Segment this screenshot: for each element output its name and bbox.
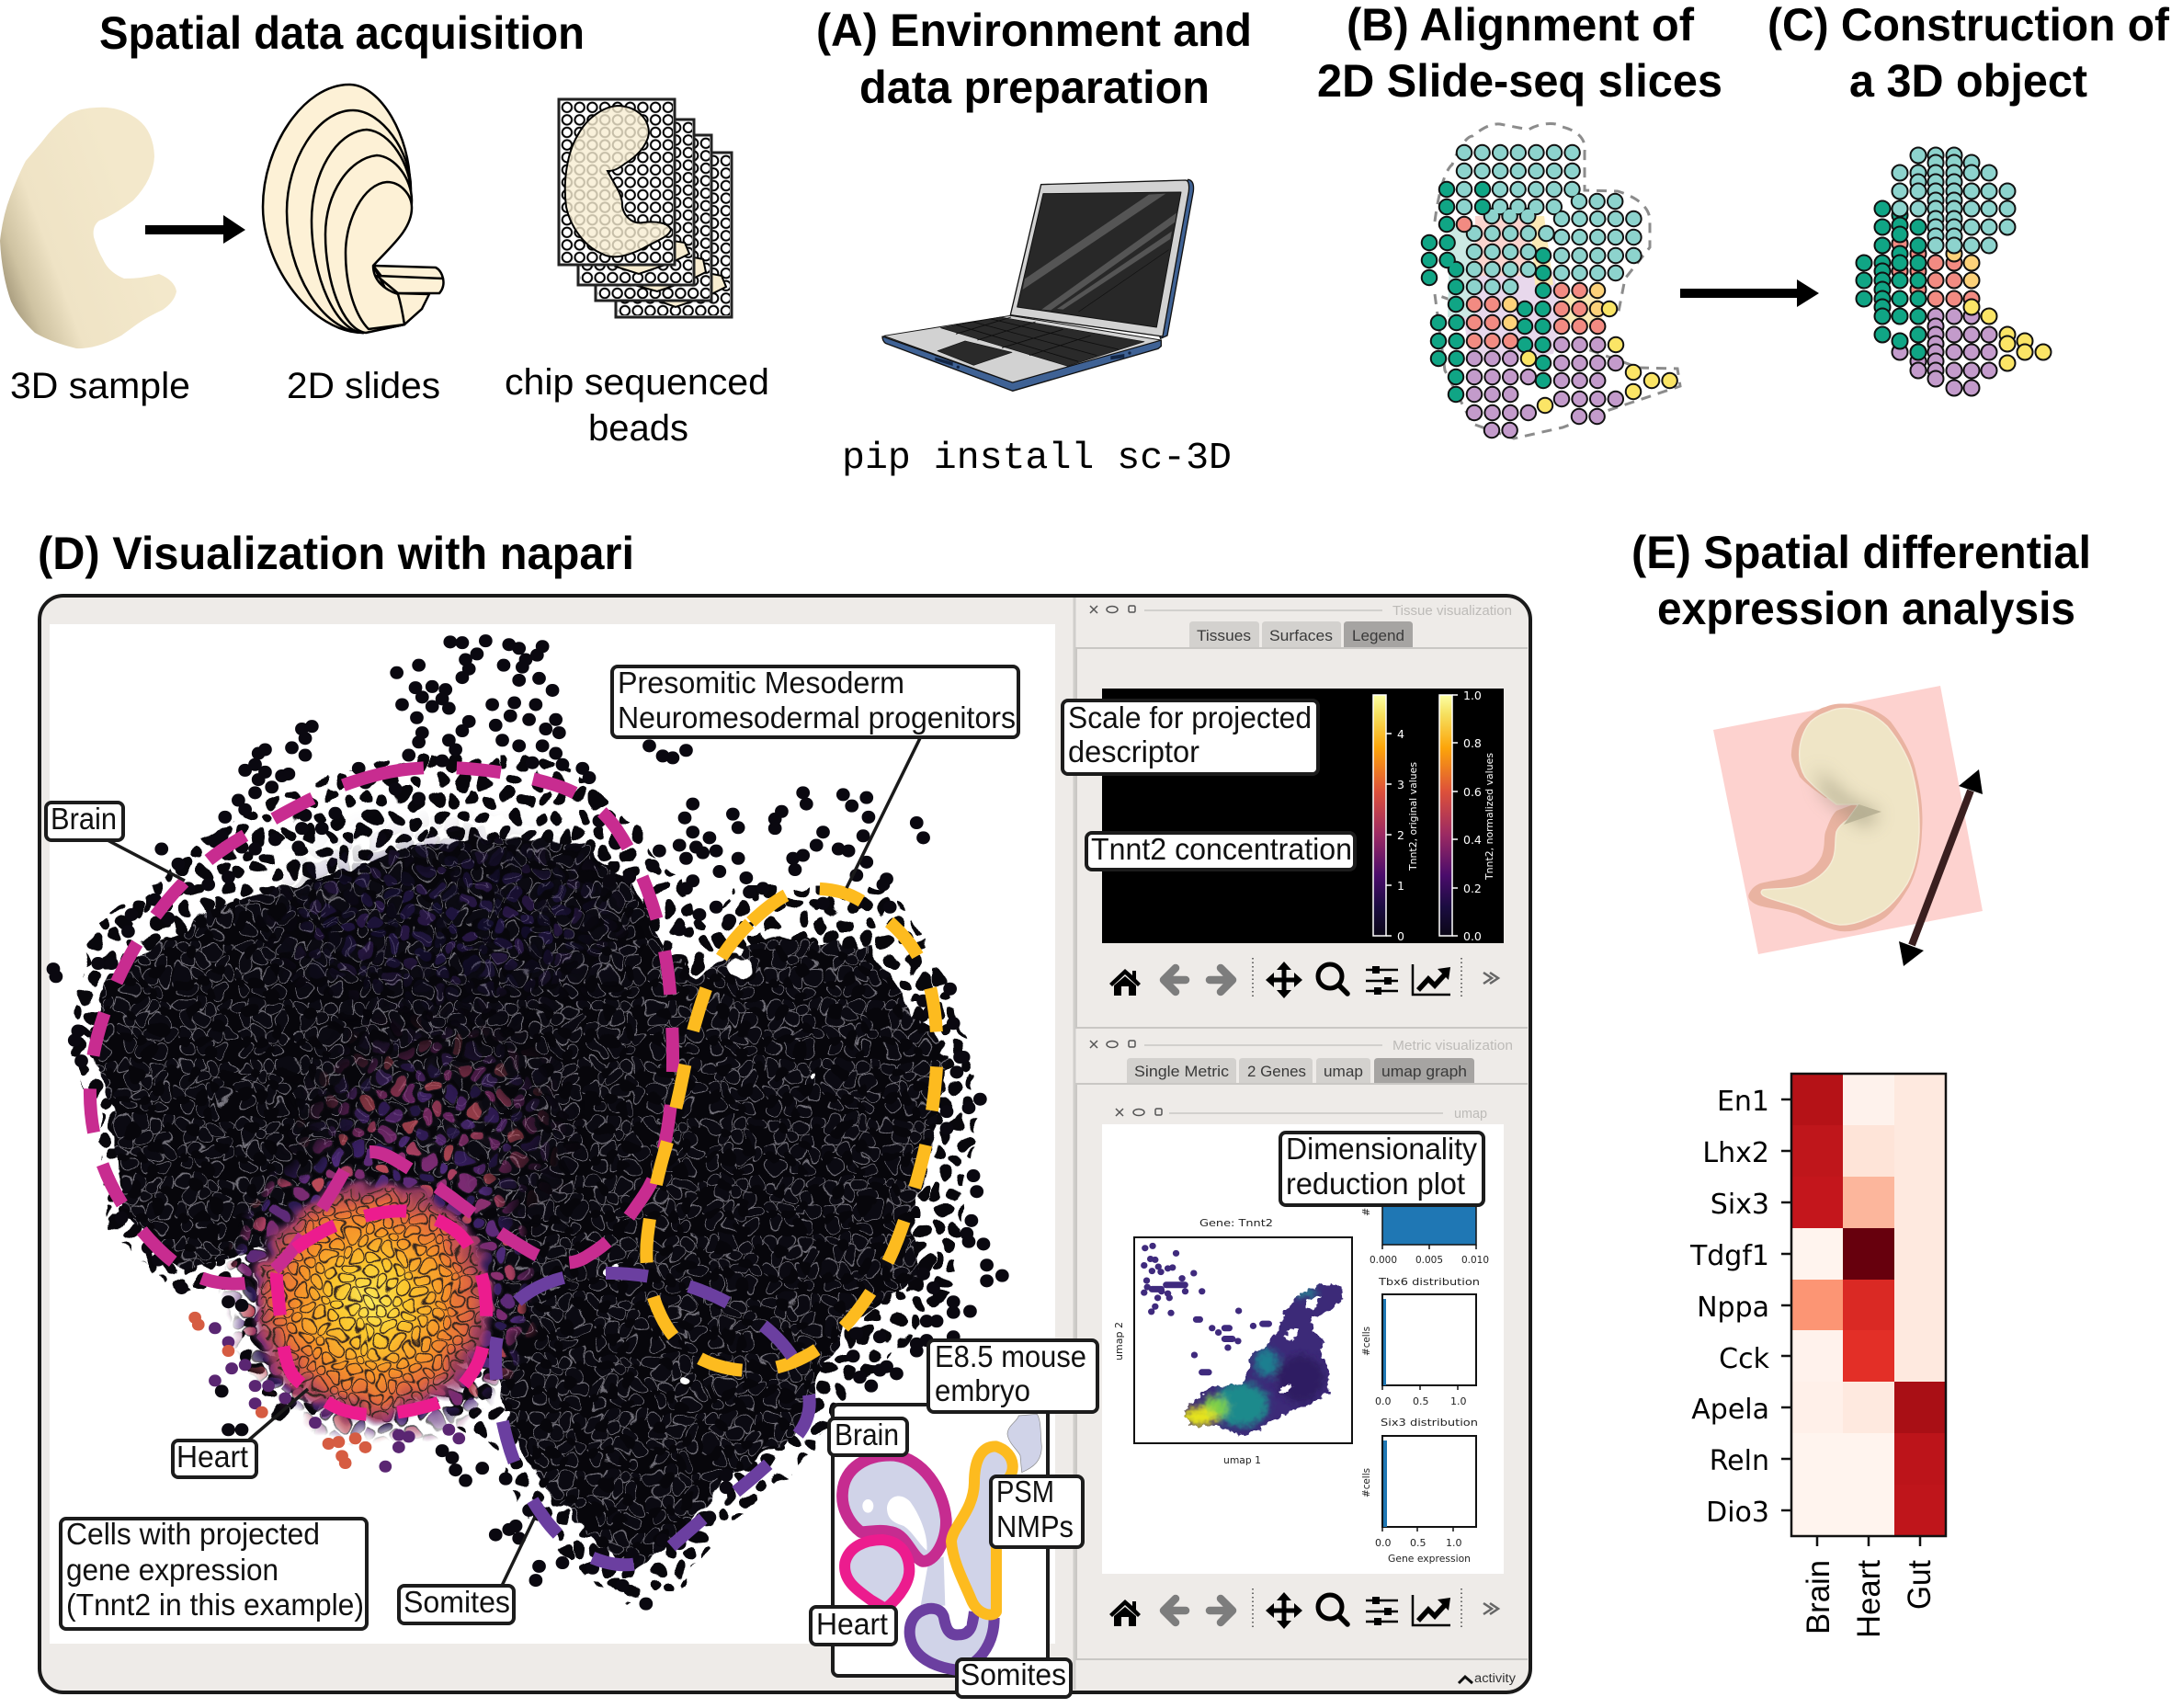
icon: 2D slides stack — [263, 85, 443, 333]
tissue labels: Brain — [1801, 1560, 1836, 1634]
heading: C construction of a 3D object — [1767, 0, 2169, 107]
chart: Six3 distribution histogram: 0.5 — [1410, 1537, 1426, 1549]
chart: colorbar normalized values: 0.8 — [1463, 736, 1482, 750]
gene labels: Six3 — [1711, 1189, 1769, 1221]
chart: overlapping aligned slices — [1429, 123, 1680, 438]
panel: tissue visualization dock — [1063, 598, 1528, 1690]
arrow: sample to slides — [145, 215, 245, 244]
heading: E spatial differential expression analysis: (E) Spatial differential — [1631, 527, 2091, 578]
chart: 3D object dots — [1857, 147, 2052, 395]
gene labels: Lhx2 — [1702, 1137, 1769, 1169]
chart: umap scatter — [1113, 1217, 1352, 1466]
callout: heart: Heart — [176, 1440, 248, 1474]
callout: inset PSM NMPs: PSM — [996, 1475, 1054, 1509]
icon: 3D sample embryo — [0, 108, 176, 348]
icon: embryo with region outlines — [842, 1414, 1041, 1670]
callout: cells with projected gene expression: Cells with projected — [66, 1517, 320, 1551]
panel: napari window — [40, 596, 1530, 1692]
label: activity — [1459, 1671, 1516, 1685]
leader: presomitic mesoderm — [847, 738, 920, 888]
heading: spatial data acquisition: Spatial data acquisition — [99, 7, 585, 59]
scatter: outlying cells, upper — [53, 641, 981, 1129]
heading: C construction of a 3D object: a 3D object — [1849, 55, 2087, 107]
chart: Tbx6 distribution histogram: #cells — [1360, 1327, 1372, 1356]
chart: colorbar original values: 3 — [1397, 778, 1404, 791]
callout: Tnnt2 concentration: Tnnt2 concentration — [1091, 832, 1352, 866]
heading: D visualization with napari: (D) Visualization with napari — [38, 528, 634, 579]
callout: dimensionality reduction plot: Dimensionality — [1286, 1132, 1477, 1166]
callout: presomitic mesoderm: Neuromesodermal progenitors — [618, 700, 1016, 734]
chart: top histogram: # — [1360, 1208, 1372, 1216]
heading: A environment and data preparation: data preparation — [859, 62, 1210, 113]
callout: inset heart: Heart — [816, 1607, 888, 1641]
chart: colorbar original values: 4 — [1397, 727, 1404, 741]
panel: umap figure — [1102, 1124, 1504, 1574]
callout: inset PSM NMPs: NMPs — [996, 1509, 1074, 1543]
chart: top histogram: 0.010 — [1461, 1254, 1489, 1266]
label: chip sequenced beads: beads — [588, 408, 688, 449]
label: activity: activity — [1474, 1671, 1516, 1685]
callout: presomitic mesoderm: Presomitic Mesoderm — [618, 666, 904, 700]
toolbar: matplotlib navigation top — [1109, 958, 1498, 999]
chart: colorbar normalized values — [1439, 689, 1495, 943]
icon: embryo with cutting plane — [1713, 686, 1983, 966]
tabs: single metric, 2 genes, umap, umap graph: umap graph — [1381, 1063, 1467, 1080]
panel: metric visualization dock — [1076, 1038, 1528, 1685]
toolbar: matplotlib navigation bottom — [1109, 1588, 1498, 1630]
callout: cells with projected gene expression: (Tnnt2 in this example) — [66, 1588, 364, 1622]
scatter: dense cell mass with heart core — [69, 754, 979, 1604]
icon: laptop — [882, 179, 1194, 391]
callout: dimensionality reduction plot: reduction plot — [1286, 1167, 1465, 1201]
callout: somites: Somites — [404, 1585, 510, 1619]
ring: brain region — [90, 768, 673, 1284]
scatter: heart outliers purple — [215, 1328, 460, 1466]
chart: colorbar normalized values: 0.6 — [1463, 785, 1482, 799]
tissue labels: Heart — [1851, 1560, 1887, 1638]
chart: colorbar original values — [1373, 695, 1419, 943]
scatter: outlying cells, lower — [121, 1176, 1003, 1604]
chart: top histogram: 0.000 — [1370, 1254, 1397, 1266]
tabs: tissues, surfaces, legend — [1189, 621, 1413, 647]
label: umap window: umap — [1454, 1106, 1487, 1122]
label: metric visualization: Metric visualization — [1392, 1038, 1513, 1053]
heatmap cells — [1791, 1074, 1946, 1536]
icon: dock window controls — [1090, 606, 1382, 613]
gene labels: Apela — [1691, 1394, 1769, 1426]
scatter: heart outliers orange — [195, 1317, 366, 1463]
callout: brain: Brain — [51, 802, 117, 836]
tabs: tissues, surfaces, legend: Legend — [1352, 627, 1404, 644]
chart: colorbar original values: 2 — [1397, 828, 1404, 842]
callout: E8.5 mouse embryo — [928, 1339, 1097, 1412]
callout: cells with projected gene expression — [61, 1517, 367, 1629]
label: 2D slides: 2D slides — [287, 366, 440, 406]
callout: E8.5 mouse embryo: embryo — [935, 1373, 1030, 1407]
label: chip sequenced beads: chip sequenced — [505, 362, 769, 403]
chart: Six3 distribution histogram: Six3 distribution — [1381, 1417, 1478, 1429]
tabs: single metric, 2 genes, umap, umap graph: umap — [1324, 1063, 1363, 1080]
callout: inset brain: Brain — [835, 1418, 899, 1452]
icon: umap sub-window controls — [1116, 1109, 1443, 1116]
panel: E8.5 mouse embryo inset — [811, 1339, 1097, 1697]
chart: umap scatter: Gene: Tnnt2 — [1199, 1217, 1273, 1229]
ring: somites region — [495, 1273, 810, 1565]
callout: presomitic mesoderm — [612, 666, 1018, 737]
tissue labels — [1801, 1560, 1938, 1638]
leader: heart — [248, 1389, 308, 1440]
chart: Six3 distribution histogram — [1360, 1417, 1478, 1565]
tissue labels: Gut — [1902, 1560, 1938, 1610]
tabs: single metric, 2 genes, umap, umap graph: Single Metric — [1134, 1063, 1230, 1080]
tabs: tissues, surfaces, legend: Tissues — [1197, 627, 1251, 644]
chart: cell scatter cloud — [53, 641, 1003, 1604]
icon: chip sequenced beads sheets — [559, 99, 732, 317]
gene labels: Cck — [1719, 1343, 1770, 1375]
leader: somites — [502, 1517, 535, 1586]
gene labels: Reln — [1710, 1445, 1769, 1477]
chart: Six3 distribution histogram: 1.0 — [1446, 1537, 1461, 1549]
chart: top histogram: 0.005 — [1415, 1254, 1443, 1266]
arrow: plane normal direction — [1899, 769, 1983, 966]
label: chip sequenced beads — [505, 362, 769, 449]
ring: presomitic mesoderm region — [646, 889, 937, 1371]
icon: metric dock window controls — [1090, 1041, 1382, 1048]
chart: Six3 distribution histogram: #cells — [1360, 1468, 1372, 1497]
callout: cells with projected gene expression: gene expression — [66, 1553, 278, 1587]
tabs: single metric, 2 genes, umap, umap graph — [1127, 1058, 1474, 1083]
chart: Tbx6 distribution histogram: Tbx6 distribution — [1378, 1276, 1480, 1288]
code: pip install sc-3D: pip install sc-3D — [842, 438, 1232, 480]
heading: B alignment of 2D Slide-seq slices: 2D Slide-seq slices — [1317, 55, 1722, 107]
callout: E8.5 mouse embryo: E8.5 mouse — [935, 1339, 1086, 1373]
callout: scale for projected descriptor: Scale for projected — [1068, 700, 1312, 734]
callout: dimensionality reduction plot — [1280, 1132, 1483, 1205]
chart: colorbar normalized values: 0.2 — [1463, 882, 1482, 895]
chart: colorbar normalized values: 1.0 — [1463, 689, 1482, 702]
callout: inset PSM NMPs — [991, 1475, 1083, 1547]
chart: colorbar original values: 0 — [1397, 929, 1404, 943]
tabs: single metric, 2 genes, umap, umap graph: 2 Genes — [1247, 1063, 1306, 1080]
chart: colorbar normalized values: 0.4 — [1463, 833, 1482, 847]
gene labels: En1 — [1717, 1086, 1769, 1118]
heading: A environment and data preparation: (A) Environment and — [816, 5, 1252, 56]
arrow: aligned to 3D object — [1680, 279, 1819, 307]
chart: Tbx6 distribution histogram: 1.0 — [1450, 1395, 1467, 1407]
chart: marker gene heatmap — [1689, 1074, 1946, 1638]
chart: colorbar original values: 1 — [1397, 879, 1404, 893]
heading: E spatial differential expression analysis — [1631, 527, 2091, 634]
gene labels: Nppa — [1697, 1292, 1769, 1324]
chart: umap scatter: umap 1 — [1223, 1454, 1261, 1466]
callout: scale for projected descriptor: descriptor — [1068, 734, 1199, 769]
heading: A environment and data preparation — [816, 5, 1252, 113]
chart: colorbar original values: Tnnt2, original values — [1407, 762, 1419, 871]
callout: scale for projected descriptor — [1063, 700, 1318, 774]
chart: colorbar normalized values: Tnnt2, normalized values — [1483, 753, 1495, 881]
chart: Tbx6 distribution histogram — [1360, 1276, 1480, 1407]
chart: Six3 distribution histogram: Gene expression — [1388, 1553, 1471, 1565]
leader: brain — [108, 840, 185, 881]
panel: main 3D viewer canvas — [50, 624, 1055, 1644]
chart: umap scatter: umap 2 — [1113, 1322, 1125, 1361]
tabs: tissues, surfaces, legend: Surfaces — [1269, 627, 1333, 644]
gene labels: Tdgf1 — [1689, 1240, 1769, 1272]
chart: top histogram — [1360, 1205, 1489, 1266]
heading: B alignment of 2D Slide-seq slices: (B) Alignment of — [1347, 0, 1694, 51]
panel: colorbar legend — [1102, 689, 1504, 943]
chart: Six3 distribution histogram: 0.0 — [1375, 1537, 1392, 1549]
label: tissue visualization: Tissue visualization — [1392, 603, 1512, 619]
gene labels: Dio3 — [1706, 1497, 1769, 1529]
ring: heart region — [277, 1211, 486, 1415]
chart: Tbx6 distribution histogram: 0.5 — [1413, 1395, 1428, 1407]
chart: colorbar normalized values: 0.0 — [1463, 929, 1482, 943]
gene labels — [1689, 1086, 1770, 1529]
chart: Tbx6 distribution histogram: 0.0 — [1375, 1395, 1392, 1407]
heading: E spatial differential expression analysis: expression analysis — [1657, 583, 2075, 634]
heading: B alignment of 2D Slide-seq slices — [1317, 0, 1722, 107]
callout: inset somites: Somites — [960, 1657, 1066, 1691]
label: 3D sample: 3D sample — [10, 366, 190, 406]
